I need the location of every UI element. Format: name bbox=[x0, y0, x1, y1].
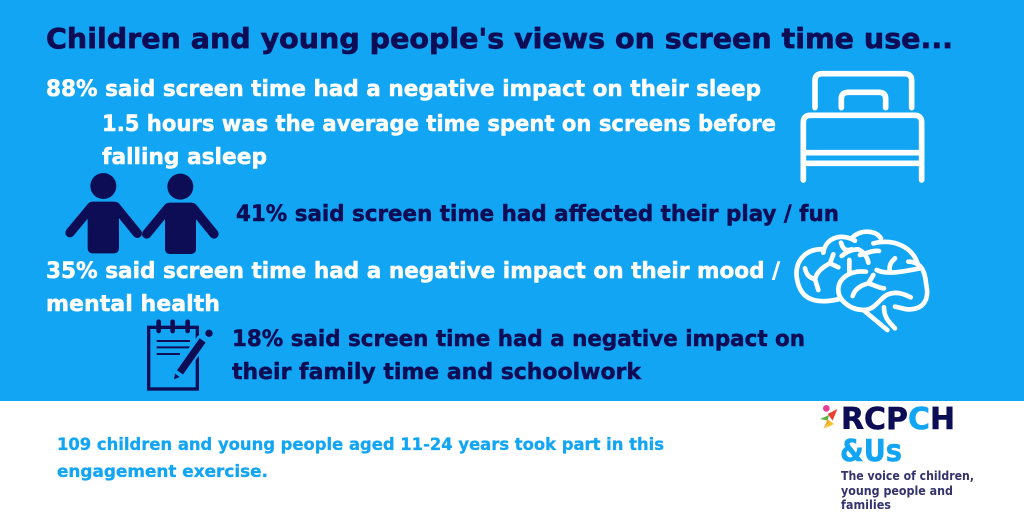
text: play and fun: 41% said screen time had affected their play / fun bbox=[236, 202, 839, 227]
text: mood and mental health: mental health bbox=[46, 292, 220, 317]
icon: notepad and pencil bbox=[149, 322, 213, 389]
title: Children and young people's views on screen time use... bbox=[46, 22, 953, 55]
text: participants note: engagement exercise. bbox=[57, 462, 268, 481]
logo icon: star figure bbox=[820, 405, 837, 429]
panel: blue background bbox=[0, 0, 1024, 401]
panel: white footer bbox=[0, 401, 1024, 512]
text: hours on screens bbox=[102, 112, 776, 170]
text: participants note: 109 children and young people aged 11-24 years took part in this bbox=[57, 435, 664, 454]
logo tagline: families bbox=[841, 498, 891, 512]
logo tagline: The voice of children, bbox=[841, 469, 974, 483]
text: family time and schoolwork: 18% said screen time had a negative impact on bbox=[232, 327, 805, 352]
logo tagline bbox=[841, 469, 974, 512]
text: mood and mental health: 35% said screen time had a negative impact on their mood / bbox=[46, 259, 781, 284]
logo tagline: young people and bbox=[841, 484, 953, 498]
text: hours on screens: falling asleep bbox=[102, 145, 267, 170]
text: family time and schoolwork bbox=[232, 327, 805, 385]
text: participants note bbox=[57, 435, 664, 481]
text: hours on screens: 1.5 hours was the average time spent on screens before bbox=[102, 112, 776, 137]
text: mood and mental health bbox=[46, 259, 781, 317]
text: sleep impact: 88% said screen time had a negative impact on their sleep bbox=[46, 77, 761, 102]
icon: bed bbox=[803, 74, 922, 180]
logo &Us: &Us bbox=[840, 434, 902, 469]
text: family time and schoolwork: their family time and schoolwork bbox=[232, 360, 642, 385]
logo: RCPCH &Us bbox=[820, 402, 974, 512]
logo wordmark: RCPCH bbox=[841, 402, 955, 437]
icon: brain bbox=[797, 232, 927, 330]
icon: two children holding hands bbox=[70, 173, 214, 254]
